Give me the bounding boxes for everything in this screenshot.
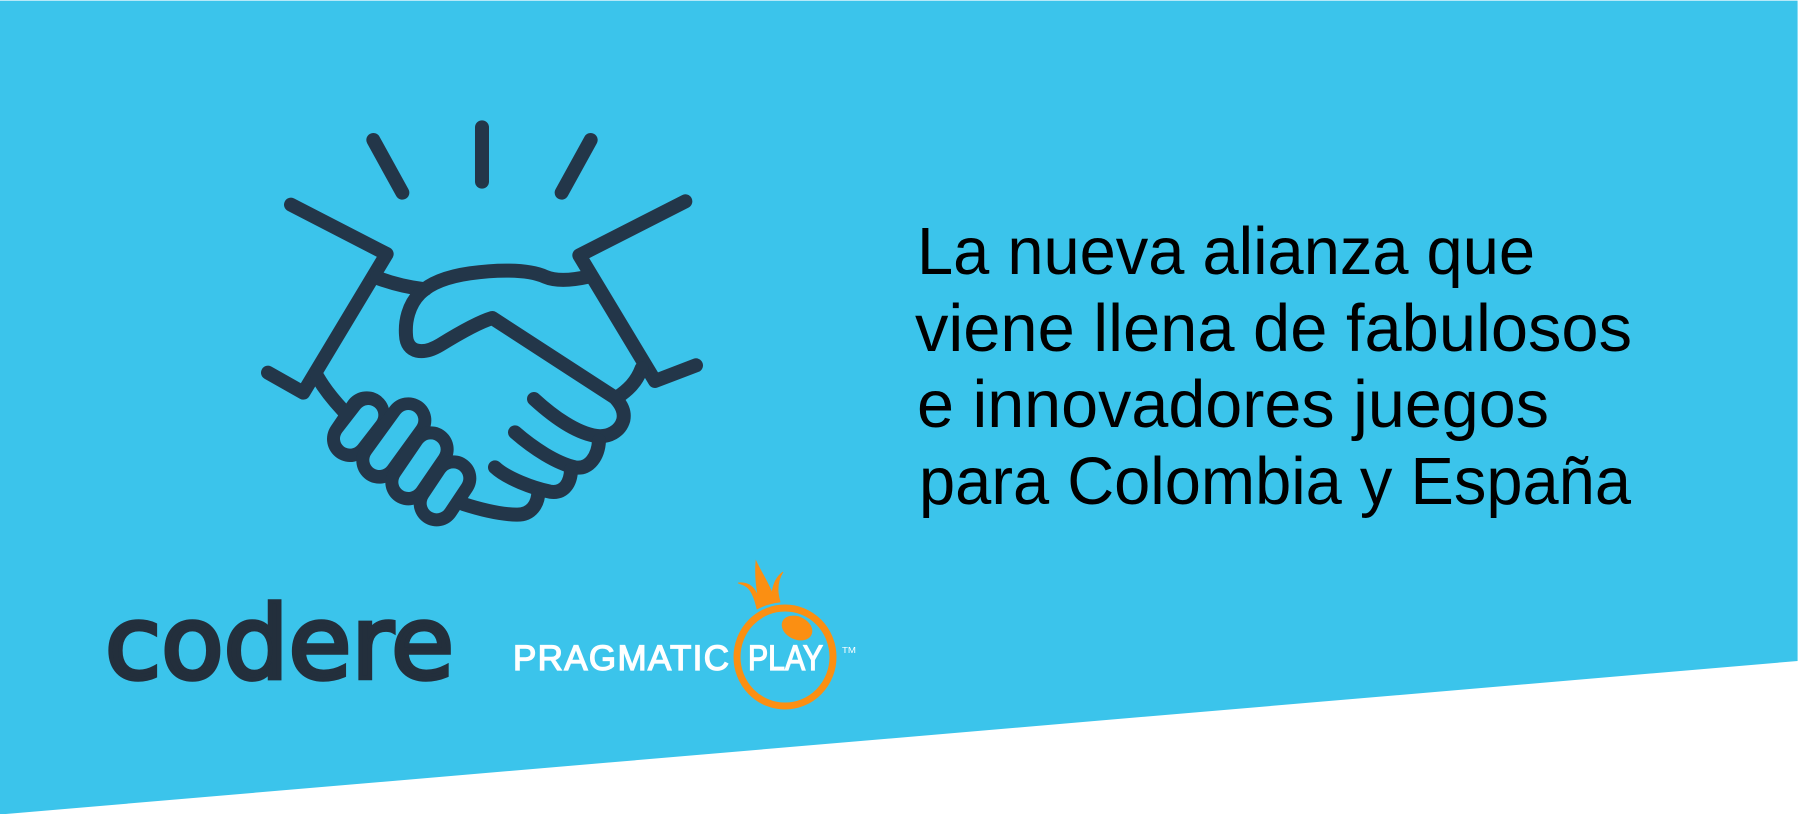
heading: alliance text: para Colombia y España bbox=[919, 444, 1632, 519]
logo ring bbox=[737, 608, 833, 706]
icon: thumb base bbox=[463, 492, 538, 515]
icon: left wrist line bbox=[377, 278, 425, 289]
logo: Pragmatic Play bbox=[513, 561, 856, 706]
logo crown bbox=[738, 561, 783, 609]
icon: sparkle rays bbox=[373, 127, 591, 193]
heading: alliance text: e innovadores juegos bbox=[917, 367, 1549, 442]
icon: knuckle holes bbox=[350, 415, 453, 503]
heading: alliance text: viene llena de fabulosos bbox=[915, 291, 1632, 366]
icon: right cuff bbox=[579, 201, 696, 381]
icon: left forearm line bbox=[317, 377, 343, 411]
icon: right forearm line bbox=[617, 368, 642, 398]
logo trademark: TM bbox=[842, 646, 856, 655]
icon: second finger bbox=[515, 432, 599, 468]
icon: left cuff bbox=[268, 205, 387, 393]
icon: knuckles outer bbox=[350, 414, 453, 503]
heading: alliance text: La nueva alianza que bbox=[917, 214, 1535, 289]
icon: clasped hand outline bbox=[406, 271, 624, 436]
logo wordmark: PRAGMATIC bbox=[513, 639, 729, 678]
heading: alliance text bbox=[915, 214, 1632, 519]
logo dot bbox=[778, 611, 816, 645]
icon: third finger bbox=[495, 467, 571, 492]
logo: Pragmatic Play: PLAY bbox=[748, 639, 823, 678]
icon: handshake bbox=[268, 127, 696, 515]
logo: codere: codere bbox=[105, 584, 454, 702]
